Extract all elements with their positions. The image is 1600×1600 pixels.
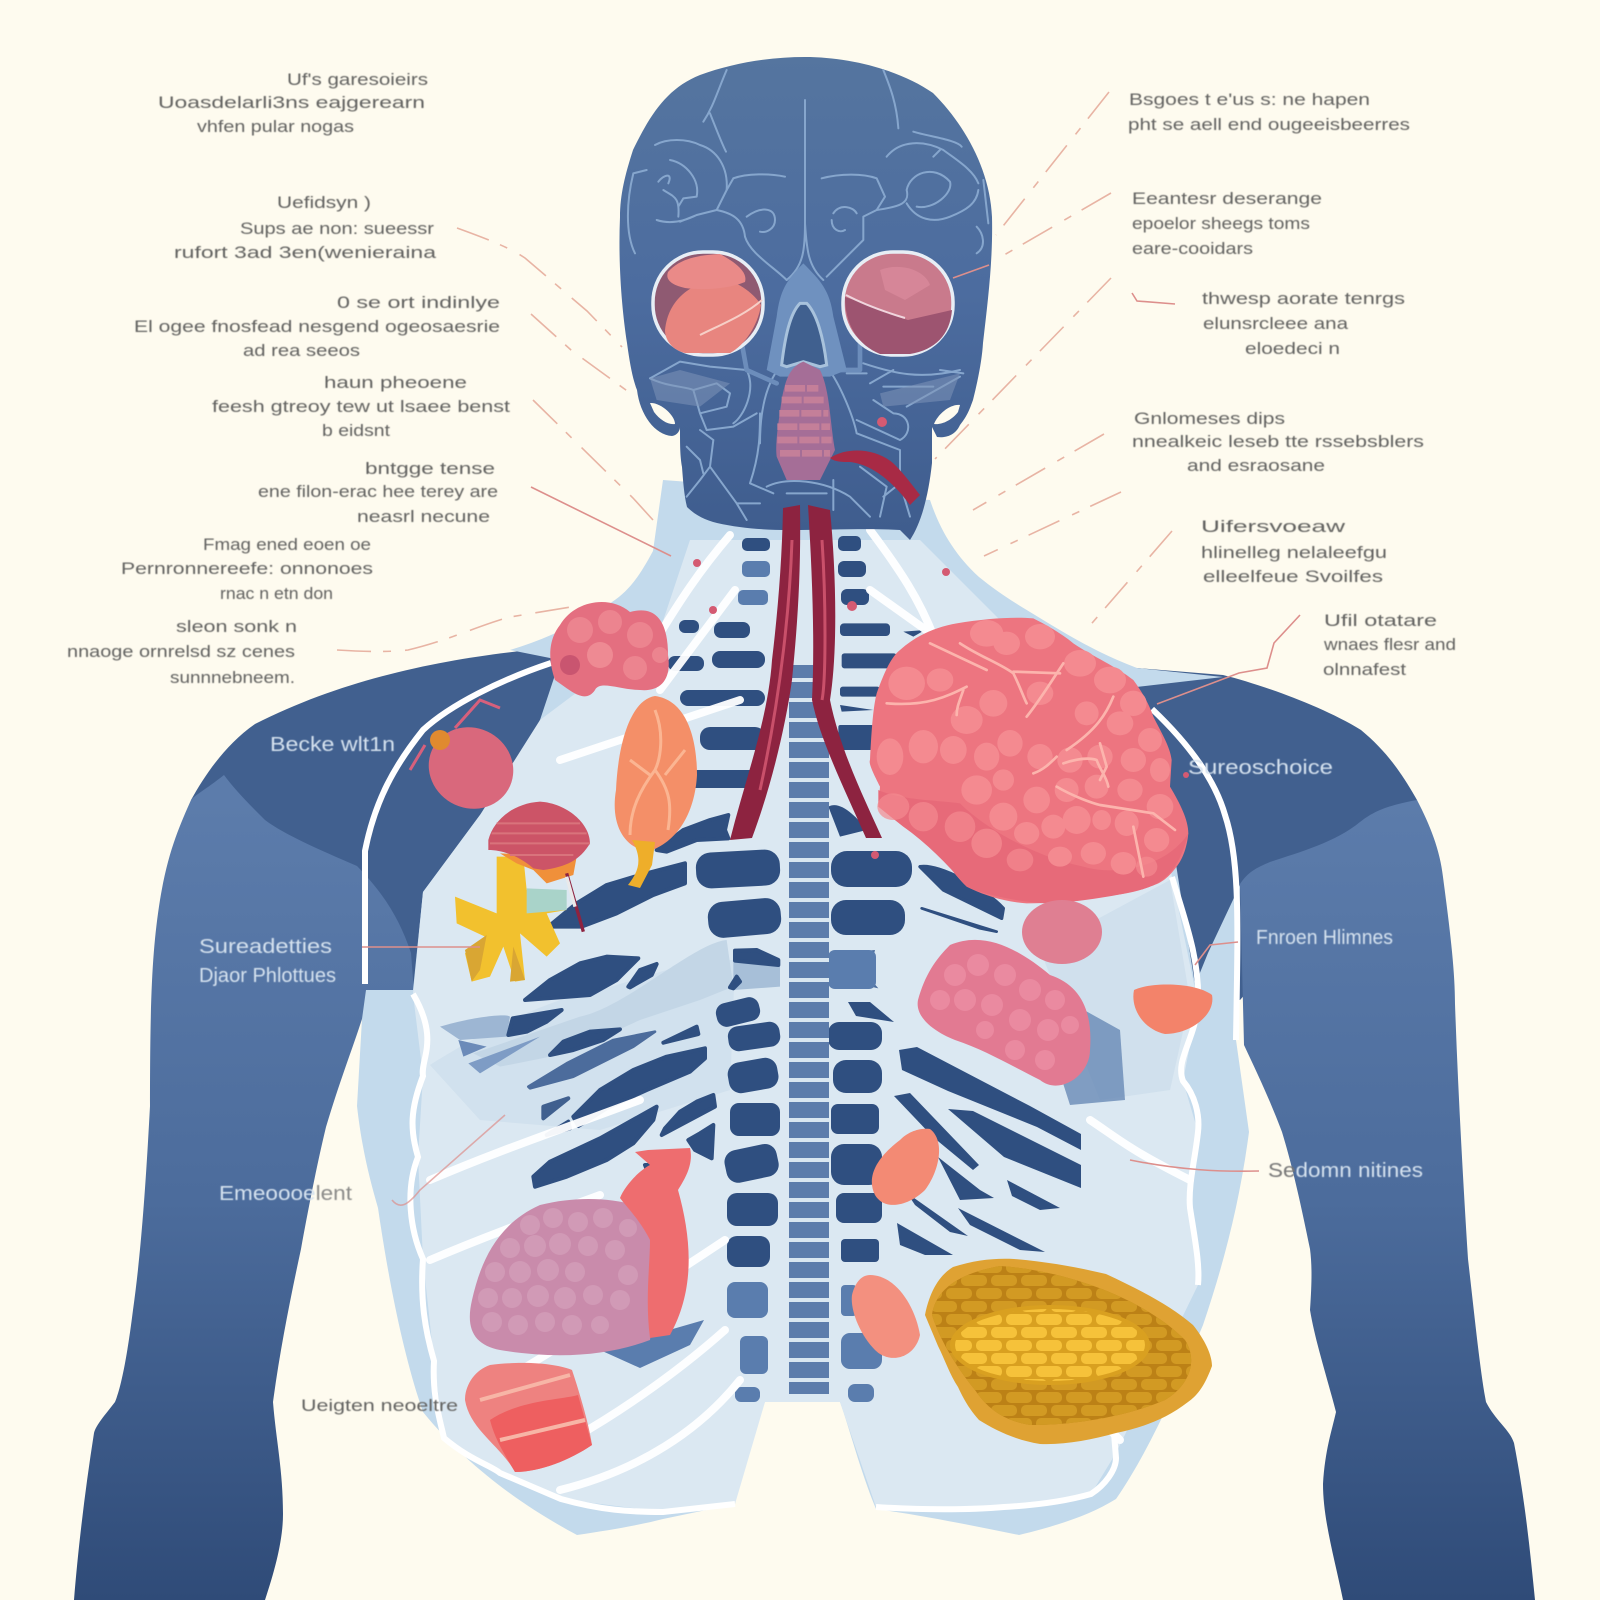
right text block 4: Gnlomeses dips — [1134, 409, 1285, 428]
left text block 3 — [134, 293, 500, 360]
right eye socket — [843, 252, 953, 355]
left text block 1: vhfen pular nogas — [197, 117, 354, 136]
right text block 4 — [1132, 409, 1424, 475]
right text block 3 — [1202, 289, 1405, 358]
left text block 6 — [121, 535, 373, 603]
skull — [619, 57, 992, 540]
pink ball organ — [410, 700, 528, 824]
left text block 4 — [212, 373, 510, 440]
mouth vessel — [830, 451, 920, 505]
shoulder contour line — [365, 663, 551, 984]
large right lung organ — [870, 618, 1188, 903]
left text block 1: Uf's garesoieirs — [287, 70, 428, 89]
left text block 3: ad rea seeos — [243, 341, 360, 360]
left text block 2 — [174, 193, 437, 262]
right text block 1: pht se aell end ougeeisbeerres — [1128, 115, 1410, 134]
right text block 3: elunsrcleee ana — [1203, 314, 1349, 333]
left text block 5: ene filon-erac hee terey are — [258, 482, 498, 501]
upper left organ — [550, 602, 669, 696]
right text block 3: thwesp aorate tenrgs — [1202, 289, 1405, 308]
right shoulder contour line — [1152, 709, 1237, 1040]
right text block 2: eare-cooidars — [1132, 239, 1253, 258]
right text block 6: olnnafest — [1323, 660, 1406, 679]
golden organ — [925, 1259, 1212, 1444]
ear notch right — [934, 405, 960, 424]
left text block 2: rufort 3ad 3en(wenieraina — [174, 243, 437, 262]
left text block 3: El ogee fnosfead nesgend ogeosaesrie — [134, 317, 500, 336]
spine — [789, 665, 829, 1394]
left text block 7 — [67, 617, 297, 687]
red flap — [620, 1148, 691, 1338]
torso — [357, 480, 1249, 1535]
white ribs — [430, 530, 1190, 1490]
pink mass — [918, 940, 1090, 1086]
cheek meshes — [650, 370, 960, 407]
left arm — [74, 775, 414, 1600]
left pale rib shading — [430, 960, 735, 1130]
dome and yellow branching organ — [455, 802, 590, 982]
orange organ — [615, 696, 697, 888]
left zoomed rib gap shapes — [440, 815, 780, 1188]
lighter lower rib blocks — [600, 561, 1125, 1402]
right text block 3: eloedeci n — [1245, 339, 1340, 358]
right text block 2: epoelor sheegs toms — [1132, 214, 1310, 233]
left text block 7: sunnnebneem. — [170, 668, 295, 687]
right text block 2 — [1132, 189, 1322, 258]
rib cage — [430, 530, 1190, 1490]
label: upper left arm: Becke wlt1n — [270, 734, 395, 756]
right text block 6 — [1323, 611, 1456, 679]
shoulders — [191, 648, 1417, 1000]
left text block 4: feesh gtreoy tew ut lsaee benst — [212, 397, 510, 416]
right arm — [1240, 800, 1535, 1600]
label: left arm two-line: Djaor Phlottues — [199, 965, 336, 987]
left text block 3: 0 se ort indinlye — [337, 293, 500, 312]
right text block 1 — [1128, 90, 1410, 134]
right text block 5: elleelfeue Svoilfes — [1203, 567, 1383, 586]
left text block 1: Uoasdelarli3ns eajgerearn — [158, 93, 425, 112]
right rib blocks — [828, 536, 1081, 1262]
label: lower torso: Ueigten neoeltre — [301, 1396, 458, 1415]
right text block 6: Ufil otatare — [1324, 611, 1437, 630]
right text block 4: nnealkeic leseb tte rssebsblers — [1132, 432, 1424, 451]
right text block 5: hlinelleg nelaleefgu — [1201, 543, 1387, 562]
label: left arm two-line: Sureadetties — [199, 936, 332, 958]
rib cage interior — [413, 540, 1198, 1512]
nasal cavity — [767, 263, 847, 480]
right text block 5: Uifersvoeaw — [1201, 517, 1346, 536]
left text block 6: Fmag ened eoen oe — [203, 535, 371, 554]
left text block 1 — [158, 70, 428, 136]
pink ball lower right — [1022, 900, 1102, 964]
left text block 4: haun pheoene — [324, 373, 467, 392]
left text block 2: Sups ae non: sueessr — [240, 219, 434, 238]
esophagus and airway tubes — [730, 505, 882, 840]
label: left lower arm: Emeoooe lent — [219, 1183, 352, 1205]
left text block 5 — [258, 459, 498, 526]
mid kidney — [872, 1129, 939, 1205]
label: right arm: Fnroen Hlimnes — [1256, 927, 1393, 949]
right pale rib shading — [1040, 880, 1190, 1100]
skull veins — [628, 70, 988, 520]
left rib blocks — [668, 538, 782, 1267]
lower torso scallop contour — [410, 877, 1198, 1512]
small orange organ — [1133, 985, 1212, 1034]
right text block 2: Eeantesr deserange — [1132, 189, 1322, 208]
label: right lower arm: Sedomn nitines — [1268, 1160, 1423, 1182]
right text block 6: wnaes flesr and — [1323, 635, 1456, 654]
left text block 4: b eidsnt — [322, 421, 390, 440]
left text block 5: bntgge tense — [365, 459, 495, 478]
right text block 5 — [1201, 517, 1387, 586]
left text block 7: nnaoge ornrelsd sz cenes — [67, 642, 295, 661]
connector lines — [337, 92, 1300, 1205]
label: upper right arm: Sureoschoice — [1188, 757, 1333, 779]
lower kidney — [852, 1275, 920, 1358]
right zoomed rib gap shapes — [828, 623, 1003, 988]
label: left arm two-line — [199, 936, 336, 987]
left text block 6: Pernronnereefe: onnonoes — [121, 559, 373, 578]
left text block 5: neasrl necune — [357, 507, 490, 526]
left eye socket — [653, 252, 763, 355]
red dots — [693, 417, 1189, 859]
right text block 4: and esraosane — [1187, 456, 1325, 475]
left text block 2: Uefidsyn ) — [277, 193, 371, 212]
purple mass — [470, 1199, 656, 1355]
left text block 7: sleon sonk n — [176, 617, 297, 636]
ear notch left — [650, 403, 675, 424]
right text block 1: Bsgoes t e'us s: ne hapen — [1129, 90, 1370, 109]
pink red block — [465, 1363, 592, 1472]
left text block 6: rnac n etn don — [220, 584, 333, 603]
